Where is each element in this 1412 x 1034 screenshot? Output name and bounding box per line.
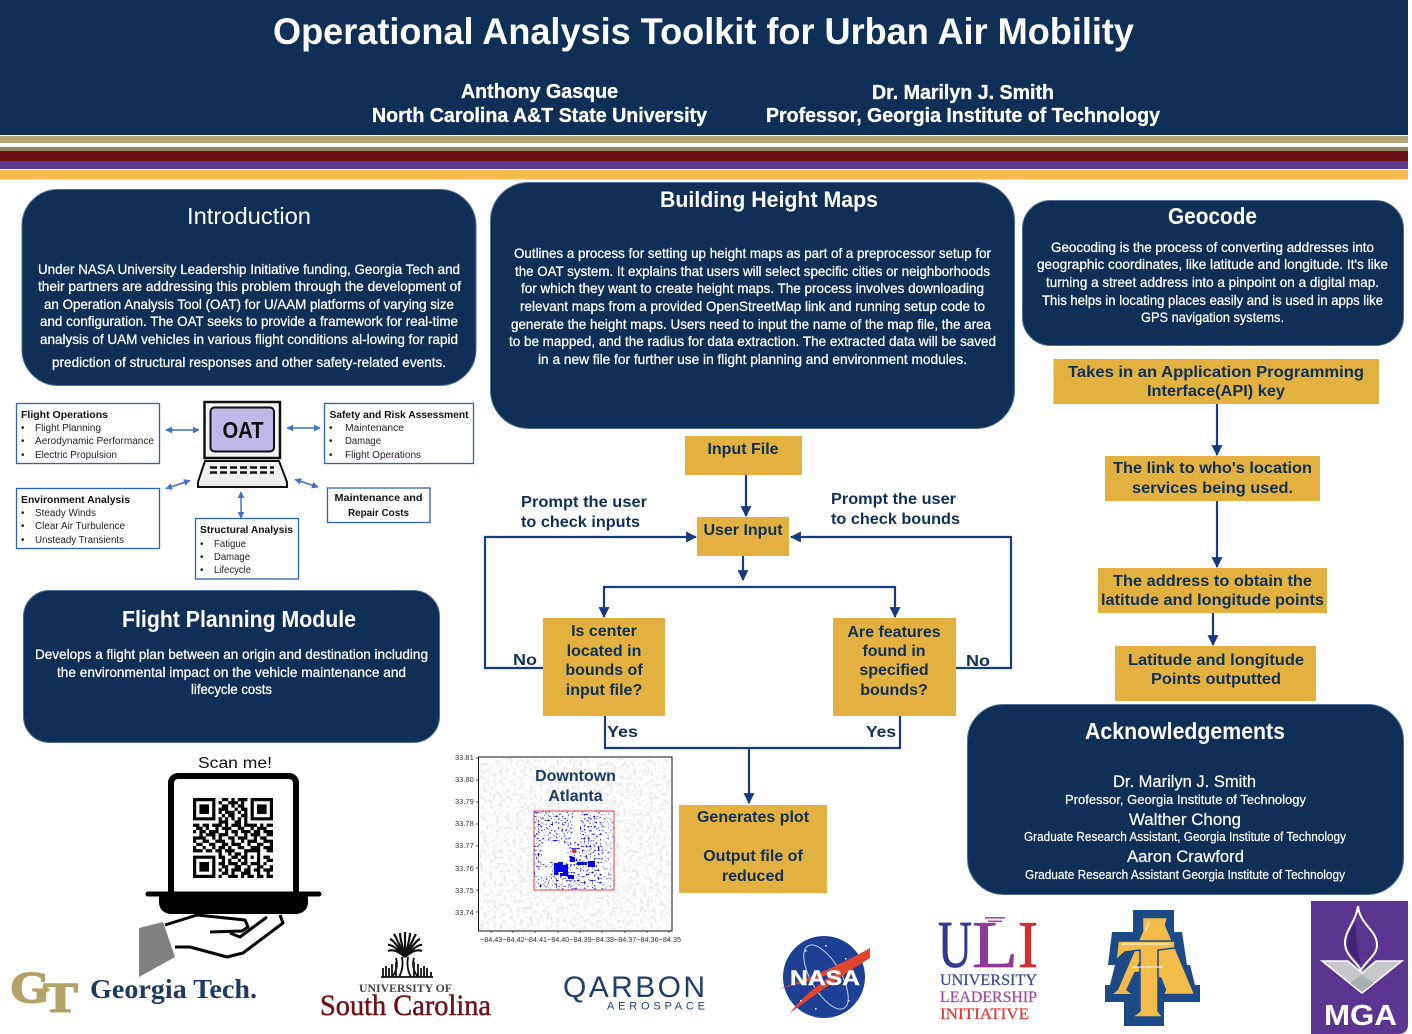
- flow labels: Yes: [866, 724, 896, 741]
- box: structural analysis: •: [200, 565, 204, 576]
- building height maps text: the OAT system. It explains that users will select specific cities or neighborhoods: [515, 263, 990, 279]
- icon: laptop on tray: [146, 776, 322, 914]
- building height maps text: Outlines a process for setting up height maps as part of a preprocessor setup for: [514, 245, 991, 261]
- logo: University Leadership Initiative: LEADERSHIP: [940, 989, 1037, 1006]
- logo: NASA: NASA: [790, 967, 860, 990]
- box: environment analysis: Environment Analysis: [21, 494, 130, 506]
- flow labels: [513, 491, 990, 741]
- box: safety and risk assessment: [324, 404, 474, 464]
- heading: geocode: Geocode: [1168, 203, 1257, 229]
- box: flight operations: •: [21, 450, 25, 461]
- flow box: is center located in bounds: bounds of: [565, 662, 643, 679]
- logo: University Leadership Initiative: U: [938, 908, 972, 982]
- introduction text: [38, 261, 461, 370]
- logo: University of South Carolina: [320, 932, 491, 1022]
- acknowledgement names: Professor, Georgia Institute of Technology: [1065, 792, 1306, 807]
- icon: OAT laptop: [198, 402, 287, 487]
- building height maps text: in a new file for further use in flight planning and environment modules.: [538, 351, 967, 367]
- header band: [0, 0, 1408, 135]
- flow box: address: [1098, 568, 1327, 613]
- box: structural analysis: Damage: [214, 552, 250, 563]
- OAT system diagram: [16, 402, 474, 579]
- QR matrix: [193, 800, 273, 876]
- flow box: location services link: [1105, 456, 1320, 501]
- box: flight operations: Flight Operations: [21, 409, 108, 421]
- y axis ticks: 33.76: [455, 864, 474, 873]
- flow box: location services link: services being used.: [1132, 480, 1293, 497]
- author: Anthony Gasque: North Carolina A&T State University: [372, 105, 708, 127]
- box: safety and risk assessment: Safety and Risk Assessment: [330, 409, 469, 421]
- flow box: output points: [1115, 646, 1316, 701]
- box: structural analysis: [196, 518, 298, 579]
- flow box: input file: Input File: [707, 441, 779, 458]
- building height maps text: relevant maps from a provided OpenStreetMap link and running setup code to: [520, 298, 985, 314]
- logo: Georgia Tech: G: [10, 963, 50, 1012]
- logo: Qarbon Aerospace: QARBON: [563, 971, 705, 1004]
- box: structural analysis: Fatigue: [214, 539, 246, 550]
- flow box: address: The address to obtain the: [1113, 573, 1312, 590]
- flow box: generates plot: [679, 805, 827, 893]
- box: environment analysis: Steady Winds: [35, 508, 96, 519]
- introduction text: and configuration. The OAT seeks to provide a framework for real-time: [40, 313, 458, 329]
- logo: Georgia Tech: T: [43, 976, 78, 1022]
- logo: Georgia Tech: Georgia Tech.: [90, 974, 257, 1004]
- box: environment analysis: Clear Air Turbulence: [35, 521, 125, 532]
- flow arrows: [485, 475, 1011, 803]
- logo: NASA: [779, 936, 870, 1018]
- flight planning text: Develops a flight plan between an origin and destination including: [35, 646, 428, 662]
- geocode text: geographic coordinates, like latitude and longitude. It's like: [1037, 256, 1388, 272]
- y axis ticks: 33.78: [455, 819, 474, 828]
- logo: University Leadership Initiative: L: [972, 908, 1018, 982]
- logo: University Leadership Initiative: INITIATIVE: [940, 1006, 1029, 1023]
- box: flight operations: [16, 404, 160, 464]
- flow labels: to check inputs: [521, 514, 640, 531]
- box: environment analysis: •: [21, 508, 25, 519]
- box: structural analysis: •: [200, 552, 204, 563]
- y axis ticks: [455, 753, 474, 917]
- author: Dr. Marilyn J. Smith: Dr. Marilyn J. Smith: [872, 82, 1054, 104]
- flow box: user input: [697, 517, 789, 556]
- acknowledgement names: Graduate Research Assistant, Georgia Institute of Technology: [1024, 829, 1346, 844]
- panel: geocode: [1022, 200, 1404, 346]
- flight planning text: lifecycle costs: [191, 681, 272, 697]
- flow box: address: latitude and longitude points: [1101, 592, 1324, 609]
- flow box: is center located in bounds: [543, 618, 665, 716]
- flow box: location services link: The link to who's location: [1113, 460, 1312, 477]
- y axis ticks: 33.81: [455, 753, 474, 762]
- box: environment analysis: [16, 488, 160, 548]
- flow box: are features found: [833, 618, 956, 716]
- box: safety and risk assessment: •: [329, 436, 333, 447]
- flowchart: building height maps: [485, 436, 1011, 893]
- introduction text: an Operation Analysis Tool (OAT) for U/AAM platforms of varying size: [44, 296, 454, 312]
- heading: building height maps: Building Height Maps: [660, 187, 878, 212]
- box: safety and risk assessment: Flight Operations: [345, 450, 421, 461]
- flow labels: Prompt the user: [521, 494, 647, 511]
- icon: OAT laptop: OAT: [222, 417, 264, 443]
- logo: Middle Georgia State: [1311, 901, 1408, 1034]
- geocode text: turning a street address into a pinpoint on a digital map.: [1046, 274, 1379, 290]
- flow box: generates plot: reduced: [722, 868, 784, 885]
- logo: University Leadership Initiative: [938, 908, 1038, 1023]
- flow box: is center located in bounds: located in: [567, 643, 641, 660]
- box: structural analysis: Lifecycle: [214, 565, 251, 576]
- panel: flight planning module: [24, 590, 440, 742]
- box: environment analysis: •: [21, 521, 25, 532]
- flow box: are features found: specified: [859, 662, 929, 679]
- author: Dr. Marilyn J. Smith: Professor, Georgia Institute of Technology: [766, 105, 1161, 127]
- flow labels: No: [513, 652, 537, 669]
- box: environment analysis: Unsteady Transients: [35, 535, 124, 546]
- panel: building height maps: [490, 182, 1014, 428]
- acknowledgement names: Aaron Crawford: [1127, 847, 1244, 866]
- box: maintenance and repair costs: Maintenance and: [334, 492, 422, 504]
- flow box: API key: [1054, 359, 1379, 404]
- y axis ticks: 33.74: [455, 908, 474, 917]
- panel: acknowledgements: [968, 704, 1404, 894]
- introduction text: their partners are addressing this problem through the development of: [38, 278, 461, 294]
- QR code: scan me: [139, 755, 322, 977]
- flow labels: Yes: [607, 724, 638, 741]
- title: Operational Analysis Toolkit for Urban Air Mobility: [273, 11, 1134, 52]
- flow box: are features found: Are features: [847, 624, 941, 641]
- logo: University Leadership Initiative: UNIVERSITY: [940, 972, 1037, 989]
- flow box: is center located in bounds: Is center: [571, 623, 637, 640]
- flight planning text: [35, 646, 428, 697]
- logo: University of South Carolina: UNIVERSITY OF: [359, 981, 452, 995]
- introduction text: prediction of structural responses and other safety-related events.: [52, 354, 446, 370]
- geocode text: GPS navigation systems.: [1141, 309, 1284, 325]
- heading: flight planning module: Flight Planning Module: [122, 606, 356, 632]
- flow box: output points: Latitude and longitude: [1128, 652, 1304, 669]
- y axis ticks: 33.79: [455, 797, 474, 806]
- author: Dr. Marilyn J. Smith: [766, 82, 1161, 127]
- box: structural analysis: •: [200, 539, 204, 550]
- flow box: input file: [685, 436, 802, 475]
- label: scan me: Scan me!: [198, 755, 272, 772]
- geocode text: Geocoding is the process of converting addresses into: [1051, 239, 1374, 255]
- geocode text: [1037, 239, 1388, 325]
- box: flight operations: Electric Propulsion: [35, 450, 117, 461]
- flow box: generates plot: Generates plot: [697, 809, 810, 826]
- heading: introduction: Introduction: [187, 203, 311, 229]
- building height maps text: for which they want to create height maps. The process involves downloading: [521, 280, 984, 296]
- chart title: [535, 768, 616, 805]
- introduction text: Under NASA University Leadership Initiative funding, Georgia Tech and: [38, 261, 460, 277]
- flow labels: No: [966, 653, 990, 670]
- x axis ticks: −84.43−84.42−84.41−84.40−84.39−84.38−84.37−84.36−84.35: [480, 935, 681, 944]
- axis ticks: [476, 758, 669, 933]
- box: flight operations: Flight Planning: [35, 423, 101, 434]
- box: safety and risk assessment: Damage: [345, 436, 381, 447]
- flow box: API key: Takes in an Application Programming: [1068, 364, 1364, 381]
- icon: hand holding tray: [139, 915, 283, 977]
- flow labels: Prompt the user: [831, 491, 956, 508]
- flight planning text: the environmental impact on the vehicle maintenance and: [57, 664, 406, 680]
- box: flight operations: Aerodynamic Performance: [35, 436, 154, 447]
- flow box: user input: User Input: [703, 522, 783, 539]
- flow labels: to check bounds: [831, 511, 960, 528]
- logo: Georgia Tech: [10, 963, 257, 1022]
- box: flight operations: •: [21, 436, 25, 447]
- box: maintenance and repair costs: Repair Costs: [348, 507, 409, 519]
- author: Anthony Gasque: Anthony Gasque: [461, 81, 618, 103]
- logo: University of South Carolina: South Carolina: [320, 989, 491, 1022]
- acknowledgement names: [1024, 772, 1346, 882]
- box: flight operations: •: [21, 423, 25, 434]
- geocode arrows: [1213, 404, 1217, 645]
- flow box: are features found: found in: [862, 643, 926, 660]
- clear areas inside the extracted region: [535, 812, 580, 876]
- flow box: is center located in bounds: input file?: [566, 682, 642, 699]
- logo: North Carolina A&T: [1105, 910, 1200, 1026]
- building height maps text: [509, 245, 996, 367]
- logo: University Leadership Initiative: I: [1018, 908, 1038, 982]
- flow box: generates plot: Output file of: [703, 848, 803, 865]
- flow box: are features found: bounds?: [860, 682, 928, 699]
- building height maps text: to be mapped, and the radius for data extraction. The extracted data will be saved: [509, 333, 996, 349]
- box: safety and risk assessment: •: [329, 450, 333, 461]
- flow box: API key: Interface(API) key: [1147, 383, 1285, 400]
- box: safety and risk assessment: •: [329, 423, 333, 434]
- solid building footprints: [554, 857, 595, 879]
- heading: acknowledgements: Acknowledgements: [1085, 718, 1285, 744]
- introduction text: analysis of UAM vehicles in various flight conditions al-lowing for rapid: [40, 331, 458, 347]
- chart title: Atlanta: [548, 788, 603, 805]
- acknowledgement names: Walther Chong: [1129, 810, 1241, 829]
- y axis ticks: 33.75: [455, 886, 474, 895]
- colour stripes: [0, 136, 1408, 180]
- panel: introduction: [22, 190, 476, 386]
- logo: Qarbon Aerospace: AEROSPACE: [607, 1000, 705, 1012]
- building height maps text: generate the height maps. Users need to input the name of the map file, the area: [511, 316, 991, 332]
- acknowledgement names: Graduate Research Assistant Georgia Institute of Technology: [1025, 867, 1345, 882]
- logo: Middle Georgia State: MGA: [1324, 1000, 1397, 1032]
- box: environment analysis: •: [21, 535, 25, 546]
- box: safety and risk assessment: Maintenance: [345, 423, 404, 434]
- arrows: OAT links: [166, 428, 320, 518]
- acknowledgement names: Dr. Marilyn J. Smith: [1113, 772, 1256, 791]
- author: Anthony Gasque: [372, 81, 708, 127]
- y axis ticks: 33.77: [455, 841, 474, 850]
- chart title: Downtown: [535, 768, 616, 785]
- geocode text: This helps in locating places easily and is used in apps like: [1042, 292, 1383, 308]
- flow box: output points: Points outputted: [1151, 671, 1281, 688]
- box: maintenance and repair costs: [328, 488, 430, 522]
- chart: Downtown Atlanta building map: [455, 753, 681, 944]
- flowchart: geocode steps: [1054, 359, 1379, 701]
- icon: palmetto tree: [381, 932, 433, 977]
- box: structural analysis: Structural Analysis: [200, 524, 293, 536]
- y axis ticks: 33.80: [455, 775, 474, 784]
